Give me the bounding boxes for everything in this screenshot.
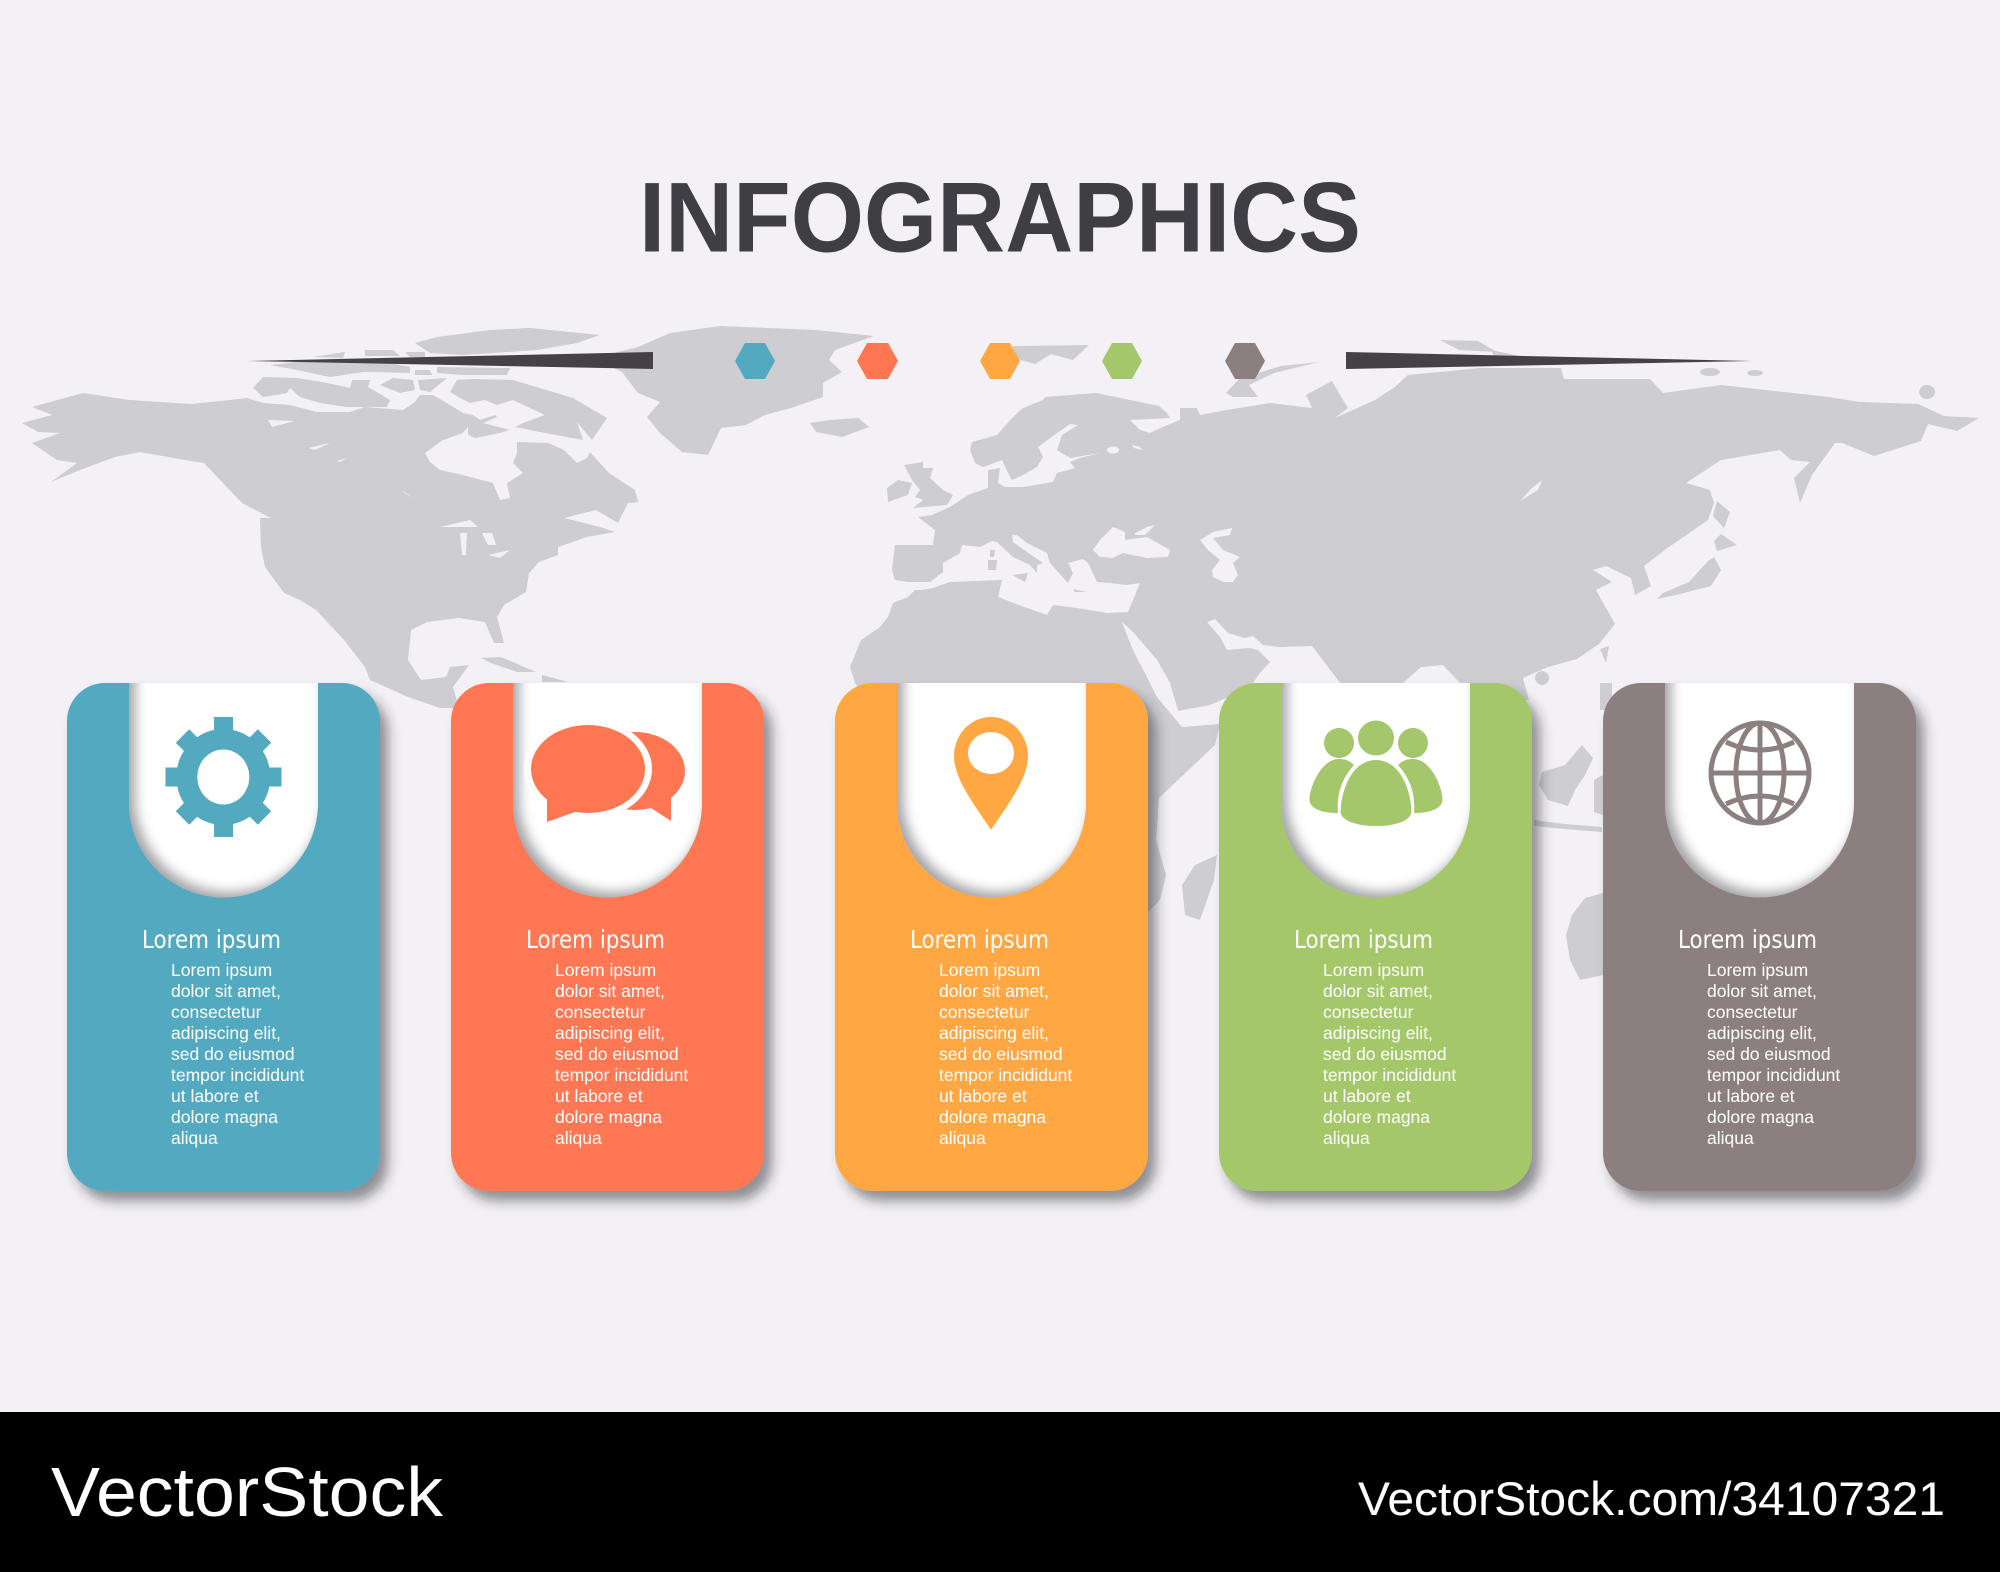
card body text: dolore magna	[1707, 1107, 1814, 1127]
world map	[22, 326, 1979, 980]
card body text: consectetur	[555, 1002, 646, 1022]
map: Japan and Sakhalin	[1657, 501, 1737, 599]
card body text: dolore magna	[171, 1107, 278, 1127]
footer logo text: VectorStock	[51, 1453, 444, 1531]
card body text: aliqua	[555, 1128, 602, 1148]
card body text: Lorem ipsum	[171, 960, 272, 980]
card body text: dolor sit amet,	[171, 981, 281, 1001]
card body text: ut labore et	[555, 1086, 643, 1106]
card body text: adipiscing elit,	[555, 1023, 665, 1043]
card background	[67, 683, 380, 1191]
panel: card 5	[1602, 683, 1933, 1210]
card body text: adipiscing elit,	[939, 1023, 1049, 1043]
card body text: adipiscing elit,	[1707, 1023, 1817, 1043]
panel: card 4	[1218, 683, 1549, 1210]
panel: card 1	[66, 683, 397, 1210]
panel: card 2	[450, 683, 781, 1210]
map: Australia	[1566, 893, 1603, 980]
card background	[835, 683, 1148, 1191]
notch	[1281, 683, 1470, 898]
footer url text: VectorStock.com/34107321	[1358, 1472, 1945, 1525]
hexagon: taupe	[1225, 343, 1265, 379]
map: Asian islands	[1013, 340, 1612, 710]
notch	[1665, 683, 1854, 898]
card heading: Lorem ipsum	[910, 925, 1049, 954]
hexagon: orange-red	[857, 343, 898, 379]
card heading: Lorem ipsum	[1678, 925, 1817, 954]
card body text: tempor incididunt	[555, 1065, 688, 1085]
card background	[1219, 683, 1532, 1191]
map: Mediterranean islands	[988, 550, 1087, 592]
card body text: aliqua	[1323, 1128, 1370, 1148]
icon: location pin	[954, 717, 1028, 830]
map: Cuba and Hispaniola	[481, 657, 568, 682]
card body text: consectetur	[939, 1002, 1030, 1022]
card heading: Lorem ipsum	[1294, 925, 1433, 954]
card body text: dolor sit amet,	[1707, 981, 1817, 1001]
map: Greenland	[593, 326, 874, 455]
card body text: dolore magna	[939, 1107, 1046, 1127]
card body text: consectetur	[171, 1002, 262, 1022]
card heading: Lorem ipsum	[142, 925, 281, 954]
card body text: dolor sit amet,	[1323, 981, 1433, 1001]
card background	[451, 683, 764, 1191]
hexagon: green	[1102, 343, 1142, 379]
icon: gear	[166, 717, 282, 837]
card body text: dolor sit amet,	[555, 981, 665, 1001]
card body text: dolor sit amet,	[939, 981, 1049, 1001]
title: INFOGRAPHICS	[639, 162, 1361, 272]
map: Eurasia	[892, 368, 1979, 711]
card body text: ut labore et	[1323, 1086, 1411, 1106]
card body text: dolore magna	[1323, 1107, 1430, 1127]
map: Borneo	[1539, 745, 1593, 806]
icon: speech bubbles	[524, 719, 685, 822]
card body text: tempor incididunt	[1323, 1065, 1456, 1085]
card body text: aliqua	[171, 1128, 218, 1148]
footer bar	[0, 1412, 2000, 1572]
card body text: ut labore et	[171, 1086, 259, 1106]
card body text: sed do eiusmod	[1323, 1044, 1447, 1064]
card body text: consectetur	[1323, 1002, 1414, 1022]
card body text: tempor incididunt	[171, 1065, 304, 1085]
card body text: sed do eiusmod	[171, 1044, 295, 1064]
card body text: adipiscing elit,	[171, 1023, 281, 1043]
icon: globe	[1711, 723, 1809, 823]
card body text: dolore magna	[555, 1107, 662, 1127]
card body text: adipiscing elit,	[1323, 1023, 1433, 1043]
card body text: consectetur	[1707, 1002, 1798, 1022]
map: Iceland	[810, 418, 869, 437]
card body text: sed do eiusmod	[939, 1044, 1063, 1064]
map: Africa	[850, 580, 1220, 960]
map: Madagascar	[1182, 855, 1217, 920]
notch	[129, 683, 318, 898]
card body text: Lorem ipsum	[555, 960, 656, 980]
card body text: aliqua	[939, 1128, 986, 1148]
notch	[513, 683, 702, 898]
card body text: tempor incididunt	[939, 1065, 1072, 1085]
card background	[1603, 683, 1916, 1191]
panel: card 3	[834, 683, 1165, 1210]
map: Victoria Island	[253, 377, 390, 407]
card body text: aliqua	[1707, 1128, 1754, 1148]
map: Arctic islands	[270, 328, 600, 393]
card body text: sed do eiusmod	[555, 1044, 679, 1064]
right spike	[1346, 352, 1752, 369]
card body text: Lorem ipsum	[1323, 960, 1424, 980]
map: Great Britain and Ireland	[887, 462, 953, 508]
map: small dots	[1535, 368, 1935, 685]
notch	[897, 683, 1086, 898]
card body text: ut labore et	[1707, 1086, 1795, 1106]
map: water cutouts	[268, 420, 1542, 727]
card heading: Lorem ipsum	[526, 925, 665, 954]
card body text: tempor incididunt	[1707, 1065, 1840, 1085]
card body text: sed do eiusmod	[1707, 1044, 1831, 1064]
map: Baffin Island	[450, 379, 607, 440]
card body text: Lorem ipsum	[939, 960, 1040, 980]
hexagon: blue	[735, 343, 775, 379]
icon: people	[1309, 720, 1443, 826]
map: North America	[22, 393, 638, 708]
card body text: ut labore et	[939, 1086, 1027, 1106]
card body text: Lorem ipsum	[1707, 960, 1808, 980]
hexagon: orange	[980, 343, 1020, 379]
left spike	[247, 352, 653, 369]
map: Java and Sulawesi	[1534, 775, 1603, 832]
